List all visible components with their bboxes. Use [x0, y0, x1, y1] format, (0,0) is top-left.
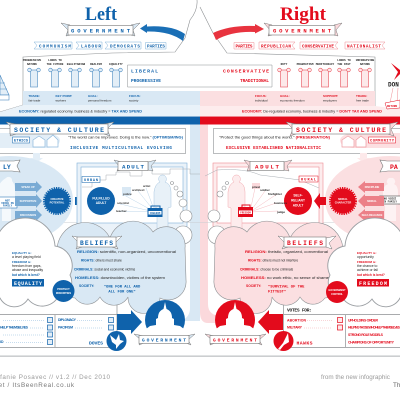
heading: votes for: VOTES FOR: — [287, 308, 312, 314]
box: conservative traditional: CONSERVATIVE — [223, 68, 269, 74]
row: right key facts — [255, 94, 369, 102]
row: left key facts: FOCUS: — [129, 94, 140, 98]
party tags: right — [234, 42, 385, 50]
row: right key facts: FOCUS: — [255, 94, 266, 98]
panel: left adult — [77, 160, 200, 237]
row: right key facts: GOAL: — [280, 94, 290, 98]
panel: left society and culture — [0, 122, 186, 154]
row: right key facts: SUPPORT: — [323, 94, 338, 98]
panel: right votes: MILITARY — [287, 326, 303, 330]
career lines and labels: soldier — [260, 188, 271, 192]
row: right key facts: individual — [255, 98, 268, 102]
text: right beliefs rows: "SURVIVAL OF THE — [268, 284, 305, 290]
labels: left columns: EGALITARIAN — [67, 63, 86, 66]
labels: right columns: PRAGMATISM — [297, 63, 314, 66]
text: beliefs rows: HOMELESS: downtrodden, victims of the system — [75, 276, 165, 280]
arrows: parenting styles: DISCUSSION — [20, 213, 36, 217]
panel: right votes: HELPING THOSE WHO HELP THEMSELVES — [348, 326, 400, 330]
banner: right society and culture: SOCIETY & CULTURE — [296, 127, 386, 134]
banner: right society and culture — [286, 122, 398, 136]
icon: right chevron and label: DON — [388, 82, 399, 88]
row: left key facts: fair trade — [28, 98, 41, 102]
figure: child — [0, 177, 15, 221]
row: left key facts: TRADE: — [28, 94, 40, 98]
career lines and labels: judge — [276, 210, 285, 214]
title: Left: Left — [85, 5, 118, 25]
badge: creative potential — [44, 188, 70, 214]
cloud: left equality: but which is best? — [12, 273, 40, 277]
row: left key facts: GOAL: — [88, 94, 98, 98]
icon: left capitol — [145, 300, 185, 340]
badge: fulfilled adult: FULFILLED — [92, 196, 110, 200]
text: beliefs rows: "ONE FOR ALL AND — [104, 284, 141, 290]
tag: right child — [380, 196, 400, 204]
credit: right — [321, 374, 400, 389]
banner: right small government: GOVERNMENT — [213, 338, 257, 344]
banner: adult: ADULT — [122, 164, 145, 170]
labels: right columns: THE PAST — [337, 63, 351, 66]
panel: right votes: UPHOLDING ORDER — [348, 318, 378, 322]
icon: right briefcase: FREEDOM — [240, 211, 251, 214]
figure: right adult — [228, 175, 245, 229]
banner: right government: GOVERNMENT — [273, 28, 332, 34]
party tags: left — [34, 42, 166, 50]
career lines and labels: police — [123, 192, 132, 196]
badge: moral character — [330, 188, 356, 214]
hill line — [205, 170, 319, 188]
banner: left small government: GOVERNMENT — [142, 338, 186, 344]
cloud: left equality: FREEDOM is: — [12, 260, 31, 264]
cloud: left equality — [0, 218, 72, 307]
party tags: right: REPUBLICAN — [261, 44, 291, 50]
arrows: right parenting: SELF-RELIANCE — [362, 213, 383, 217]
row: left key facts — [28, 94, 140, 102]
tag: urban: URBAN — [84, 179, 98, 183]
arrow: to left government — [140, 24, 185, 41]
cloud: left beliefs — [50, 221, 186, 314]
cloud: left equality: EQUALITY is: — [12, 251, 31, 255]
banner: society and culture — [6, 122, 114, 136]
icon: right houses — [342, 136, 366, 147]
arrow: left to government — [117, 310, 142, 334]
career lines and labels: scientist — [117, 201, 129, 205]
panel: right adult — [205, 160, 323, 237]
badge: moral character: CHARACTER — [335, 200, 351, 204]
row: right key facts: free trade — [356, 98, 369, 102]
panel: left family — [0, 156, 73, 244]
icon: left ribbon pyramid — [0, 75, 9, 100]
icon: houses — [33, 135, 58, 147]
tag: child: FAMILY — [3, 204, 13, 208]
icon: right chevron and label — [385, 63, 400, 109]
tag: child — [0, 197, 17, 208]
icons: left columns — [28, 68, 122, 87]
icon: hawk — [274, 331, 294, 351]
icon: briefcase: FREEDOM — [150, 212, 161, 215]
label: doves: DOVES — [89, 340, 103, 346]
cloud: right freedom: the chance to — [357, 264, 377, 268]
panel: left votes: DIPLOMACY — [58, 318, 77, 322]
career lines and labels: artist — [143, 184, 150, 188]
career lines and labels — [116, 184, 155, 213]
box: liberal progressive: LIBERAL — [131, 68, 158, 74]
text: beliefs rows: CRIMINALS: social and economic victims — [74, 268, 136, 272]
party tags: right: PARTIES — [236, 44, 253, 50]
figure: adult — [154, 175, 171, 229]
arrows: right parenting: MORAL — [367, 199, 377, 203]
tag: community: COMMUNITY — [370, 140, 395, 144]
box: freedom: FREEDOM — [359, 281, 387, 287]
panel: left votes: PACIFISM — [58, 326, 73, 330]
text: beliefs rows — [74, 250, 176, 294]
badge: creative potential: POTENTIAL — [50, 200, 65, 204]
cloud: right freedom: but which is best? — [357, 273, 385, 277]
banner: family: LY — [3, 164, 11, 171]
tag: community — [368, 137, 396, 144]
tag: right child: IN FAMILY — [383, 200, 397, 204]
row: left key facts: society — [129, 98, 139, 102]
label: hawks: HAWKS — [296, 340, 313, 346]
banner: society and culture: SOCIETY & CULTURE — [14, 127, 104, 134]
panel: left votes: ID — [0, 340, 4, 344]
panel: left votes — [0, 305, 126, 351]
box: liberal progressive — [128, 65, 200, 87]
badge: moral character: MORAL — [338, 197, 348, 201]
banner: left small government — [134, 334, 195, 345]
labels: right columns: DUTY — [281, 63, 288, 66]
badge: government control — [326, 281, 348, 303]
labels: right columns: LOOKS TO — [337, 59, 351, 62]
tag: rural: RURAL — [301, 178, 316, 182]
cloud: right freedom: achieve or fail — [357, 268, 378, 272]
icon: right capitol — [215, 300, 255, 340]
thought bubbles: left — [170, 182, 192, 244]
badge: protect minorities — [52, 280, 74, 302]
text: beliefs rows: SOCIETY: — [79, 284, 94, 288]
badge: self-reliant adult: RELIANT — [291, 198, 305, 202]
arrow: to adult right — [314, 193, 326, 209]
tag: ethics — [12, 137, 30, 144]
row: left key facts: personal freedom — [88, 98, 112, 102]
banner: beliefs: BELIEFS — [80, 240, 113, 247]
panel: right values — [200, 59, 400, 124]
career lines and labels: priest — [252, 185, 260, 189]
credit: left — [0, 374, 110, 389]
tag: right child: NO VOICE — [384, 198, 397, 200]
text: beliefs rows: RELIGION: scientific, non-organized, unconventional — [77, 250, 176, 254]
career lines and labels: firefighter — [268, 192, 283, 196]
text: beliefs rows: RIGHTS: others must share — [81, 258, 122, 262]
badge: fulfilled adult — [87, 187, 115, 215]
cloud: right freedom: EQUALITY is: — [357, 251, 376, 255]
tag: child: VOICE IN — [1, 202, 14, 205]
panel: right votes: ABORTION — [287, 318, 306, 322]
labels: left columns: EQUALITY — [109, 63, 123, 66]
labels: left columns: NATURE — [27, 63, 37, 66]
cloud: left equality: abuse and inequality — [12, 268, 43, 272]
badge: self-reliant adult — [284, 187, 312, 215]
banner: right beliefs: BELIEFS — [287, 240, 323, 247]
career lines and labels: architect — [132, 188, 145, 192]
text: right beliefs rows — [240, 250, 329, 294]
tag: child: NOT — [5, 200, 10, 202]
career lines and labels — [250, 183, 287, 214]
party tags: left: LABOUR — [81, 44, 101, 50]
labels: left columns: THE FUTURE — [47, 63, 64, 66]
badge: government control: GOVERNMENT — [328, 289, 346, 292]
banner: right government — [264, 23, 342, 36]
panel: right votes: CHAMPIONS OF OPPORTUNITY — [348, 340, 395, 344]
keywords: right: EXCLUSIVE ESTABLISHED NATIONALISTIC — [226, 146, 321, 151]
banner: left government: GOVERNMENT — [71, 28, 131, 34]
row: right key facts: employers — [323, 98, 337, 102]
arrows: right parenting — [358, 181, 384, 221]
icon: left down arrow — [30, 153, 43, 163]
labels: left columns: REALISM — [90, 63, 102, 66]
icon: dove — [106, 331, 126, 351]
labels: right columns — [281, 59, 375, 66]
badge: government control: CONTROL — [331, 293, 343, 296]
badge: protect minorities: PROTECT — [57, 287, 70, 291]
quote: right: "Protect the good things about the world." (PRESERVATION) — [219, 136, 330, 140]
tag: ethics: ETHICS — [14, 140, 29, 144]
figure: right child — [383, 178, 398, 221]
badge: creative potential: CREATIVE — [51, 197, 64, 201]
arrows: parenting styles: SPEAK UP — [21, 185, 35, 189]
keywords: left: INCLUSIVE MULTICULTURAL EVOLVING — [70, 146, 172, 151]
banner: right adult: ADULT — [255, 164, 280, 170]
banner: left government — [61, 23, 140, 36]
cloud: left equality: a level playing field — [12, 255, 41, 259]
panel: left values — [0, 59, 200, 124]
badge: self-reliant adult: SELF- — [293, 194, 303, 198]
party tags: left: PARTIES — [147, 44, 165, 50]
title: Right: Right — [280, 5, 327, 25]
row: left key facts: workers — [56, 98, 67, 102]
panel: right family — [325, 156, 400, 244]
cloud: right freedom — [328, 218, 400, 307]
cloud: right freedom: FREEDOM is: — [357, 260, 376, 264]
text: right beliefs rows: FITTEST" — [268, 290, 286, 294]
icons: right checkboxes — [338, 318, 342, 330]
credit: right: from the new infographic — [321, 374, 390, 381]
row: right key facts: economic freedom — [280, 98, 305, 102]
icon: right down arrow — [357, 153, 370, 163]
arrow: right to government — [258, 310, 283, 334]
panel: right society and culture — [214, 122, 400, 154]
badge: self-reliant adult: ADULT — [293, 204, 303, 208]
cloud: right freedom: opportunity — [357, 255, 374, 259]
labels: right columns: NATURE — [360, 63, 370, 66]
banner: right small government — [205, 334, 266, 345]
central vertical bands — [0, 124, 400, 323]
labels: left columns: LOOKS TO — [48, 59, 62, 62]
text: right beliefs rows: RELIGION: theistic, organized, conventional — [245, 250, 328, 254]
arrow: to right government — [213, 24, 264, 40]
labels: right columns: MERITOCRACY — [316, 63, 335, 66]
badge: protect minorities: MINORITIES — [56, 291, 71, 295]
quote: left: "The world can be improved. Doing is the now." (OPTIMISM/ING) — [68, 136, 183, 140]
bottom rule — [0, 355, 400, 358]
arrow: to adult left — [75, 193, 88, 209]
row: left key facts: KEY POINT: — [56, 94, 72, 98]
capitol outline — [0, 0, 400, 112]
box: equality: EQUALITY — [14, 281, 42, 287]
party tags: right: NATIONALIST — [347, 44, 381, 50]
box: liberal progressive: PROGRESSIVE — [131, 78, 161, 84]
text: right beliefs rows: SOCIETY: — [246, 284, 261, 288]
labels: right columns: UNFORGIVING — [356, 59, 375, 62]
party tags: left: DEMOCRATS — [110, 44, 140, 50]
panel: right votes: STRONG ROLE MODELS — [348, 333, 384, 337]
party tags: right: CONSERVATIVE — [302, 44, 334, 50]
arrows: parenting styles: SUPPORTIVE — [20, 199, 37, 203]
labels: left columns — [23, 59, 123, 66]
text: left economy: ECONOMY: regulated economy, business & industry = TAX AND SPEND — [19, 110, 143, 114]
row: right key facts: TRADE: — [356, 94, 367, 98]
cloud: right beliefs — [214, 221, 350, 313]
career lines and labels: teacher — [116, 209, 128, 213]
icons: right columns — [278, 68, 371, 87]
text: right beliefs rows: HOMELESS: no work ethic, no sense of shame — [241, 276, 329, 280]
career lines and labels: business — [274, 201, 287, 205]
skyline — [82, 169, 200, 187]
thought bubbles: right — [208, 182, 228, 244]
icon: right chevron and label: RETURN — [387, 105, 397, 108]
cloud: left equality: freedom from gaps, — [12, 264, 41, 268]
arrows: parenting styles — [15, 181, 42, 221]
panel: right votes — [274, 305, 400, 351]
banner: parents: PA — [390, 164, 398, 171]
text: right beliefs rows: CRIMINALS: choose to be criminals — [240, 268, 293, 272]
text: right economy: ECONOMY: De-regulated economy, business & industry = DON'T TAX AND SPEND — [242, 110, 383, 114]
labels: left columns: PROGRESSIVE — [23, 59, 42, 62]
text: right beliefs rows: RIGHTS: others must not interfere — [248, 258, 298, 262]
arrows: right parenting: DISCIPLINE — [365, 185, 380, 189]
box: conservative traditional — [200, 65, 272, 87]
panel: left votes: HELP THEMSELVES — [0, 326, 29, 330]
text: beliefs rows: ALL FOR ONE" — [108, 290, 136, 294]
box: conservative traditional: TRADITIONAL — [240, 78, 269, 84]
badge: fulfilled adult: ADULT — [96, 201, 106, 205]
icons: left checkboxes — [48, 318, 114, 344]
party tags: left: COMMUNISM — [39, 44, 71, 50]
